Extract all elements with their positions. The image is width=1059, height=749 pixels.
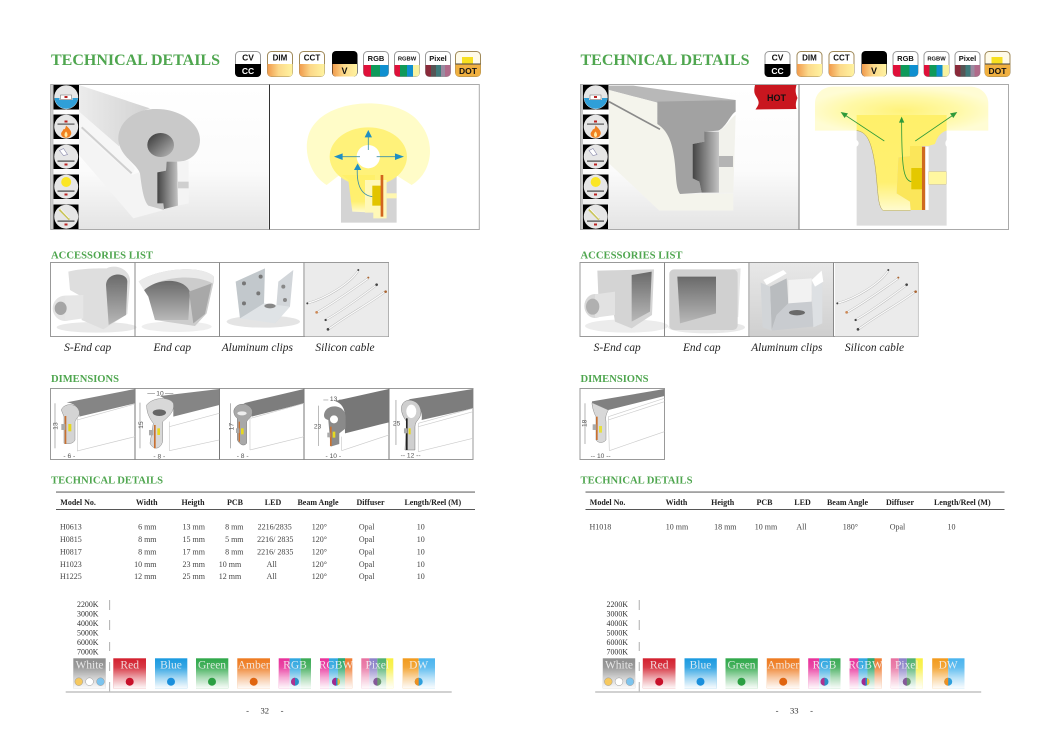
captions: accessories: Silicon cable <box>315 342 375 354</box>
swatch: Amber <box>237 658 270 688</box>
divider <box>798 84 800 230</box>
table: models: 2216/2835 <box>258 522 292 532</box>
profile 15mm <box>138 389 219 460</box>
table: models: 10 <box>948 522 956 532</box>
table: models: H0613 <box>60 522 82 532</box>
table: models: Opal <box>890 522 906 532</box>
badge: Pixel: Pixel <box>429 54 447 63</box>
swatch: Amber: Amber <box>238 660 270 672</box>
end cap round <box>139 269 214 332</box>
profile 23mm: - 10 - <box>326 453 341 460</box>
colour temperature list: 6000K <box>77 638 99 647</box>
cross-section diagram <box>307 103 430 223</box>
page number: - <box>246 706 249 716</box>
badge: RGB <box>893 52 918 76</box>
captions: accessories: End cap <box>682 342 721 354</box>
table: models: 2216/ 2835 <box>257 535 293 544</box>
captions: accessories: Aluminum clips <box>750 342 823 354</box>
S-end cap square <box>584 269 668 333</box>
swatch: DW <box>403 658 435 688</box>
table: models: Opal <box>359 572 375 581</box>
profile 25mm: -- 12 -- <box>401 452 421 459</box>
captions: accessories <box>594 342 904 354</box>
captions: accessories: End cap <box>152 342 191 354</box>
table: models: H1225 <box>60 572 82 581</box>
page number <box>246 706 284 716</box>
table: models: 120° <box>312 560 327 569</box>
badge: V <box>332 51 358 76</box>
table: models: Beam Angle <box>297 498 339 507</box>
table: models: Length/Reel (M) <box>934 498 991 507</box>
page 32 <box>50 51 480 716</box>
table: models: Width <box>666 498 688 507</box>
profile render <box>51 85 269 229</box>
profile 15mm: 10 <box>156 391 164 398</box>
page 33 <box>580 51 1010 716</box>
badge: Pixel <box>955 52 980 76</box>
heading: technical details: TECHNICAL DETAILS <box>51 476 163 486</box>
icon: light <box>54 174 79 199</box>
table: models: Opal <box>359 560 375 569</box>
badge: CV CC: CC <box>242 66 254 76</box>
swatch: DW: DW <box>939 660 958 672</box>
profile 17mm <box>228 389 304 460</box>
badge: RGBW: RGBW <box>927 56 946 62</box>
profile 23mm: 13 <box>330 396 338 403</box>
colour temperature list: 5000K <box>606 628 628 637</box>
colour swatches <box>73 658 435 688</box>
divider <box>269 84 270 230</box>
profile 18mm: 18 <box>582 419 589 427</box>
swatch: Amber <box>767 658 800 688</box>
table: models: 10 <box>417 547 425 556</box>
table: models: 180° <box>843 522 858 532</box>
table: models: Model No. <box>590 498 625 507</box>
badge: CV CC: CV <box>772 52 784 62</box>
swatch: RGB: RGB <box>813 660 837 672</box>
table: models: 18 mm <box>714 522 737 532</box>
swatch: RGB <box>808 658 840 688</box>
page number <box>776 706 813 716</box>
badge: CV CC: CC <box>771 66 784 76</box>
heading: dimensions: DIMENSIONS <box>51 374 119 385</box>
swatch: White: White <box>75 660 104 672</box>
table: models: 10 <box>417 572 425 581</box>
swatch: Red: Red <box>120 660 139 672</box>
hot ribbon: HOT <box>767 93 786 103</box>
captions: accessories: Aluminum clips <box>221 342 293 354</box>
heading: accessories: ACCESSORIES LIST <box>580 250 682 262</box>
profile 25mm <box>393 389 473 459</box>
panel: product views <box>51 84 479 230</box>
table: models: 8 mm <box>225 522 244 532</box>
table: models: 120° <box>312 535 327 544</box>
captions: accessories <box>64 342 375 354</box>
colour temperature list: 7000K <box>77 648 99 656</box>
table: models: 13 mm <box>182 522 206 532</box>
table: models: All <box>267 560 278 569</box>
badge: DOT <box>985 52 1010 76</box>
swatch: RGB: RGB <box>283 660 307 672</box>
swatch: White <box>603 658 635 688</box>
swatch: DW: DW <box>409 660 428 672</box>
swatch: RGBW: RGBW <box>319 660 353 672</box>
badge: Pixel: Pixel <box>959 54 976 63</box>
table: models: PCB <box>227 498 244 507</box>
colour temperature list: 7000K <box>606 648 628 656</box>
profile 23mm: 23 <box>314 423 322 430</box>
plastic clip <box>750 263 833 336</box>
table: models: 8 mm <box>138 535 157 544</box>
table: models: Heigth <box>711 498 735 507</box>
silicon cable <box>835 263 918 336</box>
swatch: Blue <box>684 658 717 688</box>
table: models: 6 mm <box>138 522 157 532</box>
table: models: 10 <box>417 560 425 569</box>
table: models: 10 mm <box>755 522 778 532</box>
icon: fire resistant <box>583 114 608 139</box>
badge: CV CC <box>764 52 790 77</box>
badge: V <box>862 51 887 76</box>
title: TECHNICAL DETAILS <box>51 52 220 69</box>
badge: CV CC: CV <box>242 52 254 62</box>
table: models: LED <box>794 498 811 507</box>
table: models: Diffuser <box>356 498 385 507</box>
colour temperature list: 5000K <box>77 628 99 637</box>
table: models: LED <box>265 498 281 507</box>
table: models: 10 mm <box>666 522 689 532</box>
page number: 32 <box>261 706 269 716</box>
profile 18mm: -- 10 -- <box>591 453 611 460</box>
profile 17mm: 17 <box>228 423 235 430</box>
table: models: Heigth <box>181 498 205 507</box>
table: models: 10 mm <box>134 560 157 569</box>
colour temperature list <box>77 600 110 692</box>
baseline rule <box>66 691 452 693</box>
profile 18mm <box>582 389 664 460</box>
table: models: 10 <box>417 535 425 544</box>
table: models: 23 mm <box>182 560 206 569</box>
swatch: Red <box>643 658 676 688</box>
heading: technical details: TECHNICAL DETAILS <box>580 476 693 486</box>
colour temperature list: 4000K <box>606 619 628 628</box>
badge: RGBW: RGBW <box>398 56 417 62</box>
swatch: Green: Green <box>727 660 756 672</box>
colour temperature list: 3000K <box>606 609 628 618</box>
profile 23mm <box>314 389 389 460</box>
profile 17mm: - 8 - <box>237 453 249 460</box>
table: models <box>586 492 1004 532</box>
badge row <box>235 51 480 77</box>
table: models: All <box>267 572 278 581</box>
swatch: DW <box>932 658 964 688</box>
hot ribbon <box>754 85 798 110</box>
colour temperature list: 2200K <box>606 600 628 609</box>
table: models: 15 mm <box>182 535 206 544</box>
table: models: 120° <box>312 547 327 556</box>
swatch: Pixel <box>361 658 393 688</box>
table: models: 25 mm <box>182 572 206 581</box>
table: models: 17 mm <box>182 547 206 556</box>
table: models: H1018 <box>590 522 611 532</box>
badge: DIM <box>268 52 292 76</box>
badge: RGBW <box>924 52 949 76</box>
badge: DOT: DOT <box>989 66 1007 76</box>
badge: DIM: DIM <box>802 54 817 62</box>
end cap square <box>668 268 745 333</box>
badge: RGBW <box>394 52 420 76</box>
swatch: Pixel: Pixel <box>895 660 919 672</box>
colour temperature list: 2200K <box>77 600 99 609</box>
icon: cutting <box>583 204 608 229</box>
table: models: Opal <box>359 522 375 532</box>
table: models: Opal <box>359 547 375 556</box>
icon: uv <box>54 144 79 169</box>
table: models: PCB <box>756 498 773 507</box>
swatch: Green <box>196 658 228 688</box>
swatch: Blue: Blue <box>160 660 182 672</box>
badge: RGB: RGB <box>897 54 914 63</box>
profile 13mm: 13 <box>53 422 60 430</box>
table: models: H1023 <box>60 560 82 569</box>
swatch: RGBW: RGBW <box>848 660 883 672</box>
badge: DOT <box>456 52 480 76</box>
panel: product views <box>580 84 1008 230</box>
profile 15mm: - 8 - <box>153 453 165 460</box>
captions: accessories: S-End cap <box>594 342 641 354</box>
swatch: Pixel: Pixel <box>365 660 389 672</box>
badge: RGB <box>364 52 388 76</box>
swatch: Amber: Amber <box>767 660 799 672</box>
icon: fire resistant <box>54 114 79 139</box>
panel: dimensions <box>580 388 664 460</box>
colour swatches <box>603 658 964 688</box>
arrows <box>841 112 957 182</box>
swatch: Green <box>726 658 758 688</box>
swatch: RGBW <box>848 658 883 688</box>
table: models: Length/Reel (M) <box>404 498 461 507</box>
table: models: 8 mm <box>138 547 157 556</box>
badge: V: V <box>871 66 877 76</box>
table: models: 10 mm <box>219 560 242 569</box>
table: models: 120° <box>312 572 327 581</box>
icon column <box>581 85 608 229</box>
table: models: 120° <box>312 522 327 532</box>
badge: CCT: CCT <box>833 54 850 62</box>
swatch: Blue: Blue <box>690 660 711 672</box>
table: models <box>56 492 475 581</box>
swatch: Green: Green <box>198 660 226 672</box>
table: models: 2216/ 2835 <box>257 547 293 556</box>
swatch: Red <box>113 658 146 688</box>
heading: accessories: ACCESSORIES LIST <box>51 250 153 262</box>
table: models: Diffuser <box>886 498 914 507</box>
badge row <box>764 51 1010 77</box>
badge: Pixel <box>426 52 450 76</box>
profile 25mm: 25 <box>393 420 401 427</box>
table: models: 10 <box>417 522 425 532</box>
swatch: Red: Red <box>650 660 669 672</box>
table: models: Opal <box>359 535 375 544</box>
arrows <box>334 130 404 197</box>
page number: - <box>776 706 779 716</box>
icon: cutting <box>54 204 78 229</box>
badge: DIM <box>797 52 822 76</box>
panel: dimensions <box>50 388 473 460</box>
table: models: Width <box>136 498 158 507</box>
icon: waterproof <box>583 85 608 110</box>
page number: 33 <box>790 706 799 716</box>
page number: - <box>810 706 813 716</box>
badge: CCT <box>829 52 854 76</box>
table: models: 12 mm <box>219 572 242 581</box>
badge: V: V <box>341 66 348 76</box>
profile render <box>581 85 799 229</box>
table: models: Beam Angle <box>827 498 869 507</box>
swatch: Pixel <box>891 658 923 688</box>
profile 15mm: 15 <box>138 421 145 429</box>
table: models: Model No. <box>60 498 96 507</box>
table: models: 12 mm <box>134 572 157 581</box>
badge: RGB: RGB <box>368 54 385 63</box>
badge: DOT: DOT <box>459 66 478 76</box>
icon column <box>51 85 79 229</box>
colour temperature list <box>606 600 639 692</box>
swatch: White <box>73 658 106 688</box>
table: models: 5 mm <box>225 535 244 544</box>
colour temperature list: 3000K <box>77 609 99 618</box>
table: models: H0815 <box>60 535 82 544</box>
cross-section diagram <box>815 87 988 226</box>
swatch: RGBW <box>319 658 353 688</box>
table: models: 8 mm <box>225 547 244 556</box>
silicon cable <box>305 263 388 336</box>
colour temperature list: 4000K <box>77 619 99 628</box>
swatch: Blue <box>155 658 187 688</box>
title: TECHNICAL DETAILS <box>580 52 750 69</box>
panel: accessories <box>580 262 918 336</box>
profile 13mm: - 6 - <box>63 453 75 460</box>
S-end cap round <box>53 267 137 333</box>
badge: CV CC <box>235 52 261 77</box>
badge: CCT: CCT <box>304 54 320 62</box>
profile 13mm <box>53 389 135 460</box>
colour temperature list: 6000K <box>606 638 628 647</box>
badge: CCT <box>300 52 324 76</box>
icon: light <box>583 174 608 199</box>
swatch: RGB <box>279 658 311 688</box>
table: models: All <box>796 522 807 532</box>
page number: - <box>281 706 284 716</box>
swatch: White: White <box>605 660 633 672</box>
captions: accessories: S-End cap <box>64 342 112 354</box>
icon: uv <box>583 144 608 169</box>
baseline rule <box>595 691 981 693</box>
heading: dimensions: DIMENSIONS <box>580 374 649 385</box>
panel: accessories <box>50 262 388 336</box>
captions: accessories: Silicon cable <box>845 342 904 354</box>
table: models: H0817 <box>60 547 82 556</box>
badge: DIM: DIM <box>273 54 288 62</box>
aluminum clip <box>227 268 300 328</box>
icon: waterproof <box>54 85 79 110</box>
